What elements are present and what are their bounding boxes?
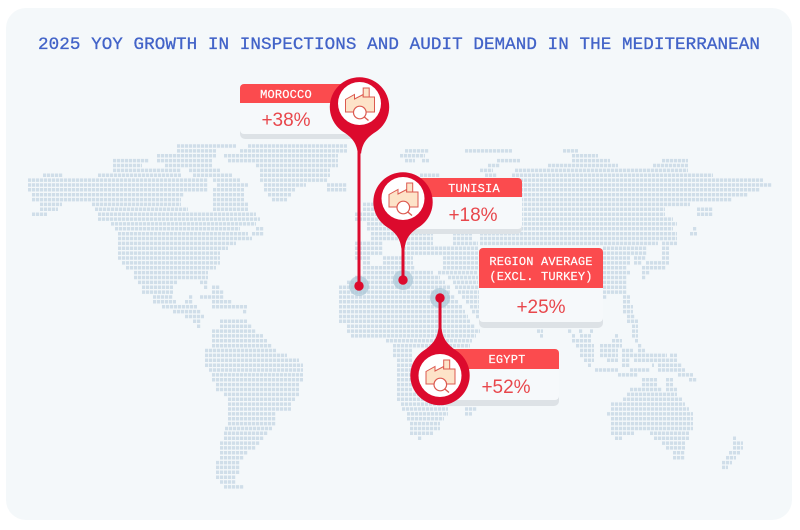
- pin with factory icon: Morocco: [330, 77, 389, 154]
- location marker: Tunisia: [393, 235, 413, 290]
- callout: Region average: (EXCL. TURKEY): [489, 270, 593, 284]
- location marker: Morocco: [349, 140, 369, 296]
- callout: Region average: [479, 248, 603, 328]
- callout: Tunisia: [405, 178, 522, 234]
- callout: Egypt: [442, 349, 559, 406]
- callout: Morocco: [240, 84, 358, 139]
- location marker: Egypt: [430, 288, 450, 348]
- title: 2025 YOY GROWTH IN INSPECTIONS AND AUDIT DEMAND IN THE MEDITERRANEAN: [38, 35, 760, 55]
- callout: Region average: +25%: [516, 297, 566, 318]
- pin with factory icon: Egypt: [410, 328, 470, 405]
- callout: Egypt: +52%: [481, 377, 531, 398]
- callout: Morocco: MOROCCO: [260, 88, 312, 102]
- callout: Morocco: +38%: [261, 110, 311, 131]
- dotted world map: [28, 146, 772, 487]
- callout: Tunisia: +18%: [448, 205, 498, 226]
- callout: Region average: REGION AVERAGE: [489, 255, 593, 269]
- callout: Egypt: EGYPT: [489, 353, 525, 367]
- callout: Tunisia: TUNISIA: [448, 182, 500, 196]
- pin with factory icon: Tunisia: [373, 172, 433, 248]
